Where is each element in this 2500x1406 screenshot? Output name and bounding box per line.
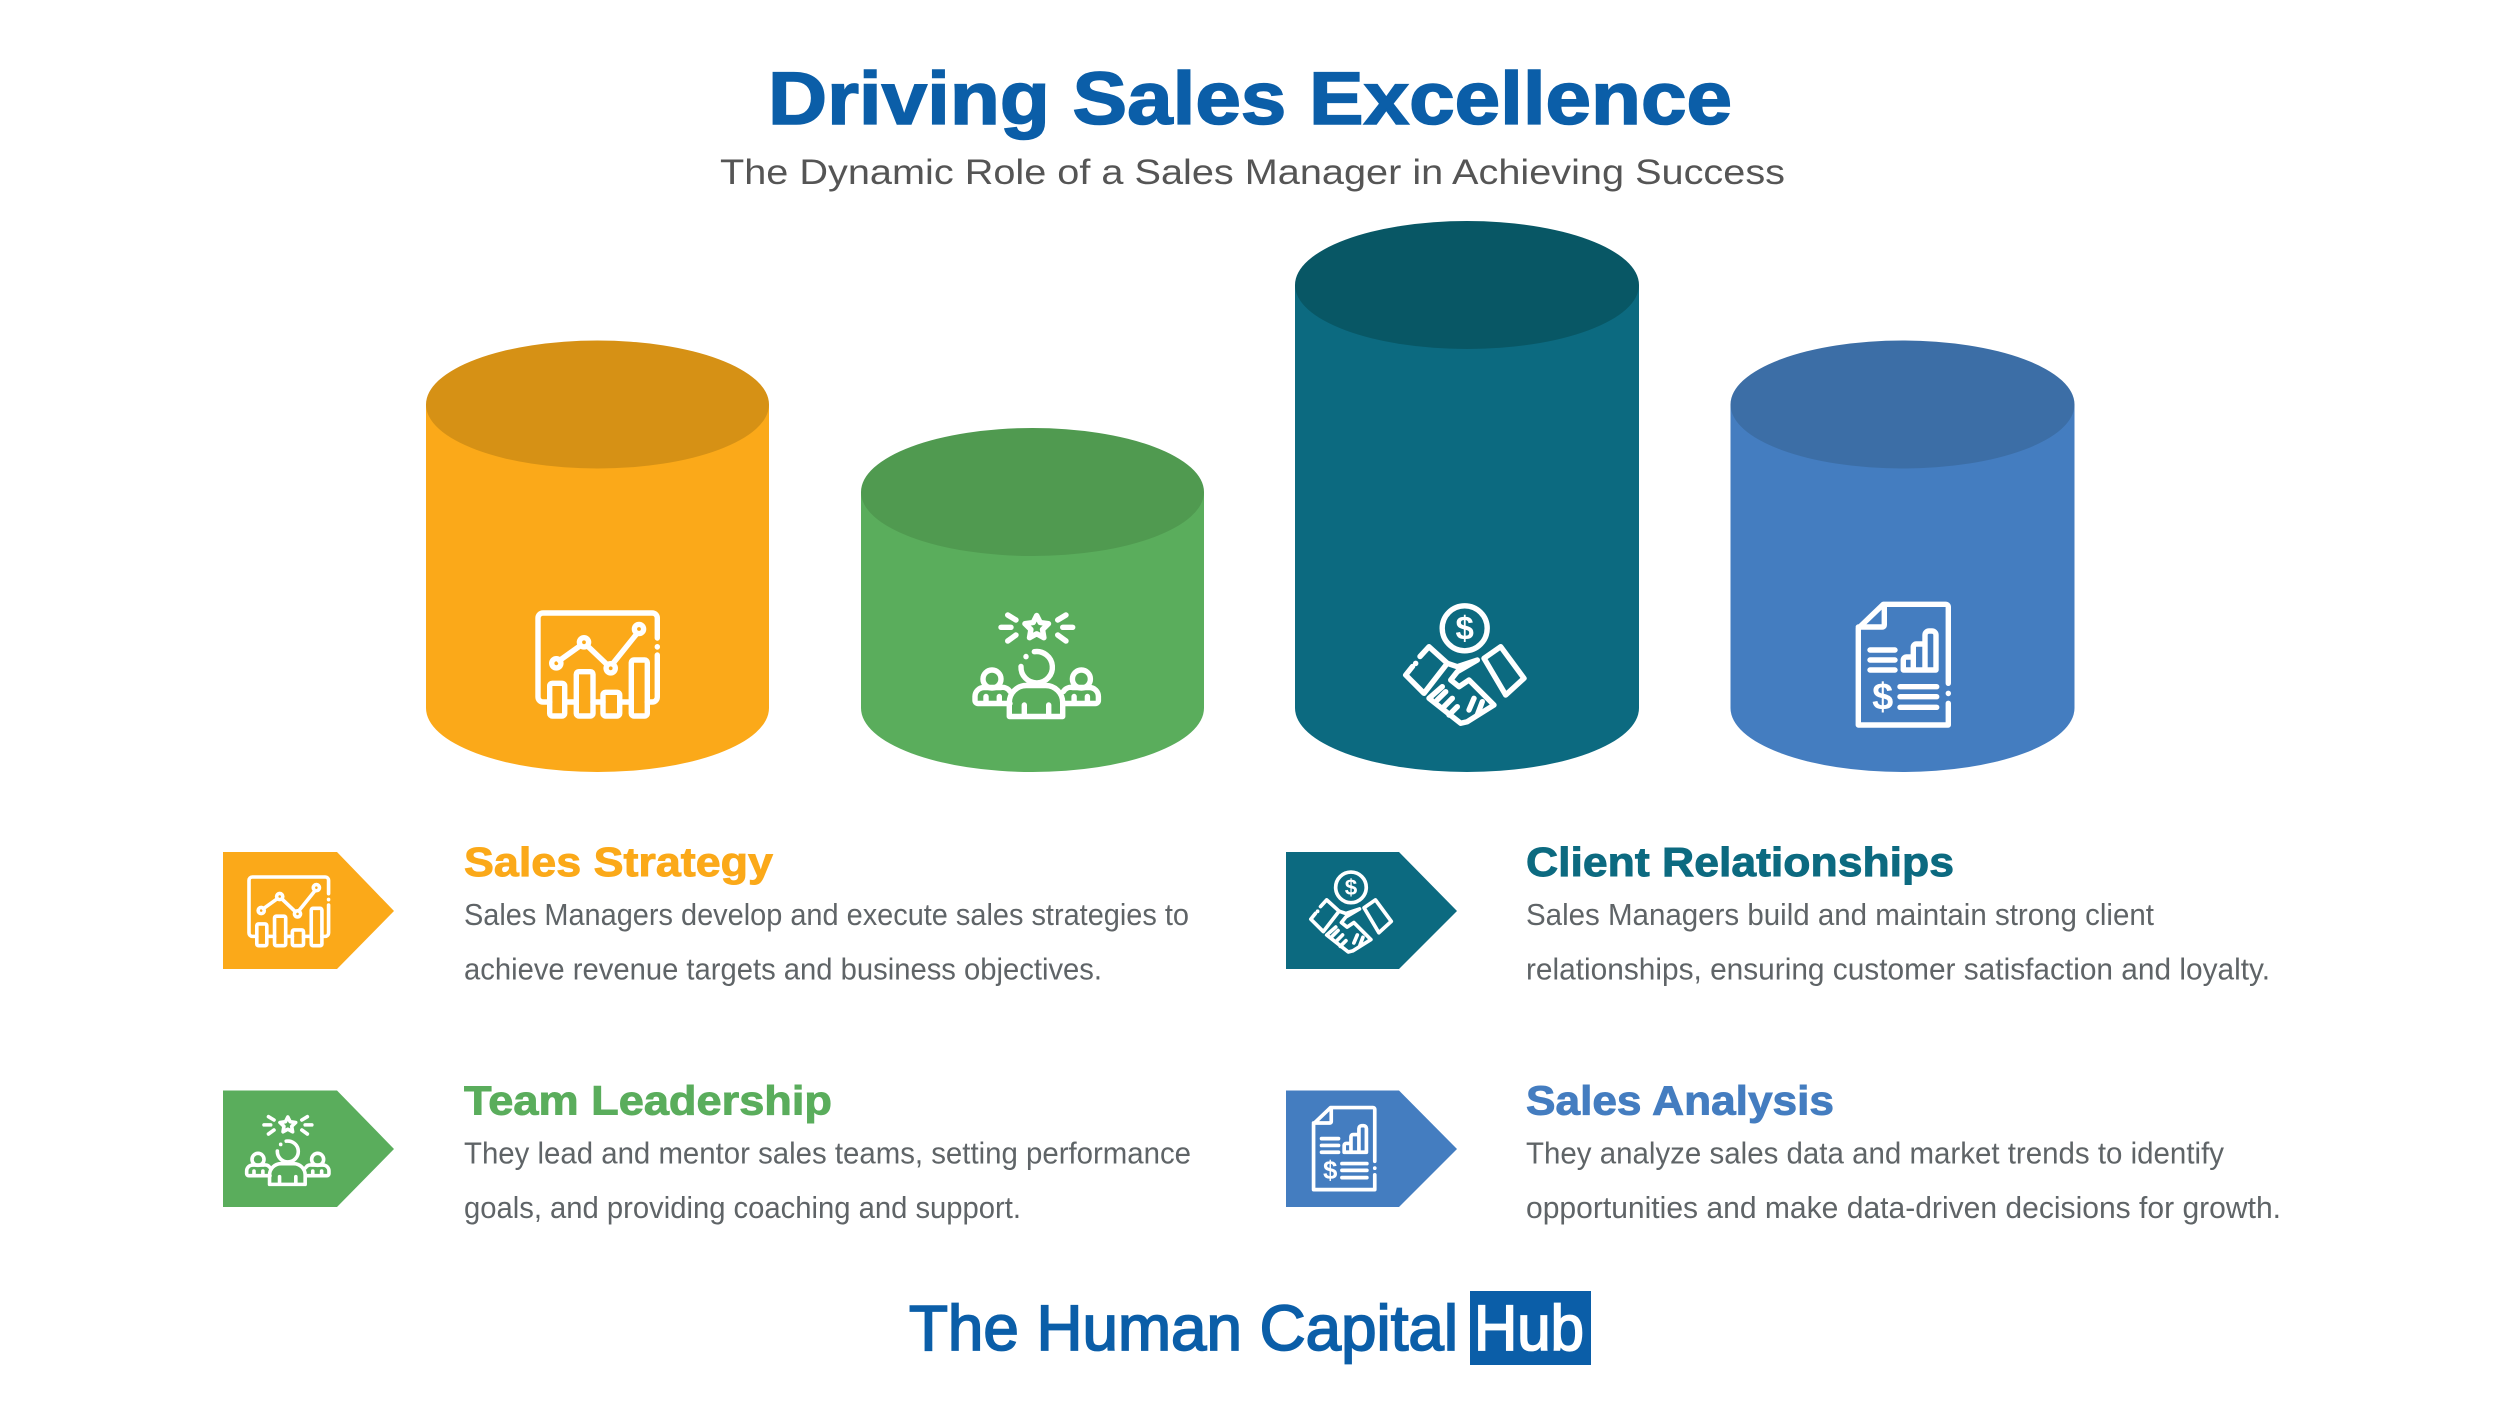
tag icon: chart board: [249, 877, 329, 946]
item: sales strategy: [223, 839, 1189, 986]
icon: team with star: [975, 615, 1098, 716]
description: They lead and mentor sales teams, setting performance: [464, 1136, 1191, 1170]
cylinder: client relationships: [1295, 221, 1639, 772]
arrow tag: [1286, 1090, 1457, 1207]
tag icon: financial report: [1314, 1108, 1375, 1190]
heading: Client Relationships: [1526, 839, 1954, 885]
tag icon: team with star: [247, 1117, 329, 1184]
tag icon: financial report: $: [1323, 1157, 1337, 1185]
cylinder: team leadership: [861, 428, 1204, 772]
cylinder: sales strategy: [426, 340, 769, 772]
description: relationships, ensuring customer satisfaction and loyalty.: [1526, 952, 2270, 986]
heading: Sales Analysis: [1526, 1078, 1834, 1124]
tag icon: handshake with dollar coin: [1311, 872, 1391, 952]
tag icon: handshake with dollar coin: $: [1345, 875, 1358, 900]
description: [1526, 1136, 2281, 1225]
item: team leadership: [223, 1078, 1191, 1225]
subtitle: The Dynamic Role of a Sales Manager in Achieving Success: [720, 153, 1785, 192]
arrow tag: [223, 852, 394, 969]
description: achieve revenue targets and business objectives.: [464, 952, 1102, 986]
description: [464, 897, 1189, 986]
arrow tag: [223, 1090, 394, 1207]
icon: chart board: [538, 613, 657, 716]
description: [464, 1136, 1191, 1225]
icon: financial report: $: [1872, 676, 1893, 718]
description: They analyze sales data and market trends to identify: [1526, 1136, 2224, 1170]
description: Sales Managers develop and execute sales strategies to: [464, 897, 1189, 932]
cylinder: sales analysis: [1730, 340, 2074, 772]
logo: The Human Capital Hub: Hub: [1474, 1292, 1584, 1364]
arrow tag: [1286, 852, 1457, 969]
item: client relationships: [1286, 839, 2270, 986]
heading: Sales Strategy: [464, 839, 773, 885]
heading: Team Leadership: [464, 1078, 832, 1124]
item: sales analysis: [1286, 1078, 2281, 1225]
icon: handshake with dollar coin: $: [1456, 610, 1474, 646]
title: Driving Sales Excellence: [768, 57, 1732, 140]
description: goals, and providing coaching and support.: [464, 1190, 1021, 1225]
icon: financial report: [1858, 604, 1948, 725]
description: Sales Managers build and maintain strong client: [1526, 897, 2154, 932]
description: opportunities and make data-driven decisions for growth.: [1526, 1190, 2281, 1225]
icon: handshake with dollar coin: [1406, 606, 1524, 723]
description: [1526, 897, 2270, 986]
logo: The Human Capital Hub: The Human Capital: [909, 1292, 1458, 1364]
